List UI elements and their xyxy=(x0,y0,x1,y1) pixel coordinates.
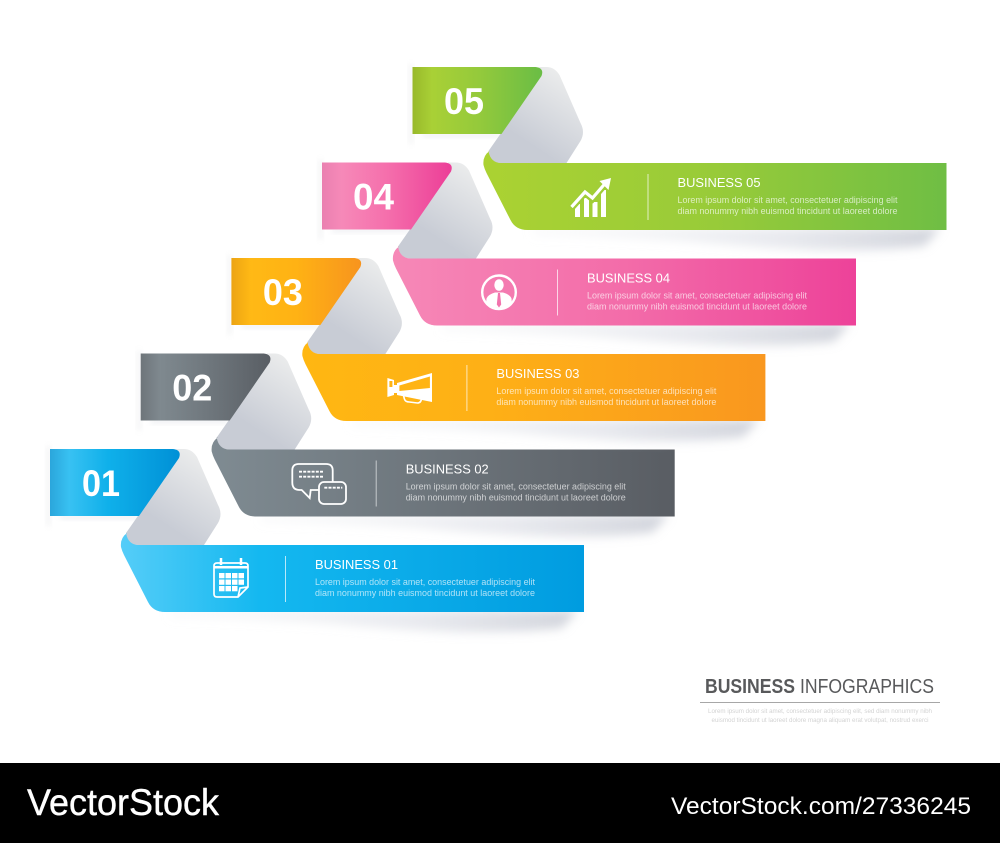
title block: business infographics xyxy=(700,676,940,724)
text: business 02: diam nonummy nibh euismod tincidunt ut laoreet dolore xyxy=(406,492,626,502)
text: business 04 xyxy=(587,270,808,312)
text: business 02: Lorem ipsum dolor sit amet, consectetuer adipiscing elit xyxy=(406,482,626,492)
step 02 ribbon xyxy=(137,350,675,537)
icon: megaphone xyxy=(387,373,432,403)
text: business 04: Lorem ipsum dolor sit amet, consectetuer adipiscing elit xyxy=(587,290,808,300)
text: business 02: BUSINESS 02 xyxy=(406,462,489,476)
icon: chat bubbles xyxy=(292,464,346,504)
text: business 03: Lorem ipsum dolor sit amet, consectetuer adipiscing elit xyxy=(496,386,717,396)
band 05 xyxy=(483,151,946,230)
step 01 ribbon xyxy=(46,446,584,632)
number tag 02 xyxy=(141,354,270,420)
divider xyxy=(376,460,377,506)
fold xyxy=(488,67,583,163)
icon: business person xyxy=(482,276,516,309)
band 02 xyxy=(212,438,675,516)
footer bar xyxy=(0,763,1000,843)
number 05: 05 xyxy=(444,81,484,122)
number tag 01 xyxy=(50,449,180,516)
fold xyxy=(307,258,402,354)
divider xyxy=(285,556,286,602)
icon: calendar xyxy=(214,558,248,597)
band 01 xyxy=(121,533,584,612)
text: business 01: diam nonummy nibh euismod tincidunt ut laoreet dolore xyxy=(315,588,535,598)
text: business 05: diam nonummy nibh euismod tincidunt ut laoreet dolore xyxy=(678,206,898,216)
footer logo: VectorStock xyxy=(27,782,219,823)
text: business 01: BUSINESS 01 xyxy=(315,557,398,572)
icon: growth chart xyxy=(572,178,611,217)
text: business 01: Lorem ipsum dolor sit amet, consectetuer adipiscing elit xyxy=(315,577,536,587)
text: business 03: BUSINESS 03 xyxy=(496,366,579,381)
band 04 xyxy=(393,246,856,326)
text: business 05 xyxy=(678,175,898,216)
text: business 04: BUSINESS 04 xyxy=(587,270,670,286)
number 02: 02 xyxy=(172,368,212,408)
number 04: 04 xyxy=(353,176,394,218)
fold xyxy=(126,449,220,545)
fold xyxy=(398,162,492,258)
text: business 03 xyxy=(496,366,717,407)
title block: business infographics: Lorem ipsum dolor sit amet, consectetuer adipiscing elit, sed diam nonummy nibh xyxy=(708,709,932,715)
title block: business infographics: BUSINESS xyxy=(705,676,795,698)
number 03: 03 xyxy=(263,272,303,313)
text: business 05: Lorem ipsum dolor sit amet, consectetuer adipiscing elit xyxy=(678,195,898,205)
fold xyxy=(217,354,311,450)
text: business 04: diam nonummy nibh euismod tincidunt ut laoreet dolore xyxy=(587,302,807,312)
number 01: 01 xyxy=(82,463,120,504)
number tag 03 xyxy=(231,258,361,325)
divider xyxy=(648,174,649,220)
number tag 05 xyxy=(412,67,542,134)
title block: business infographics: INFOGRAPHICS xyxy=(800,676,934,698)
step 03 ribbon xyxy=(227,255,765,441)
number tag 04 xyxy=(322,162,452,230)
divider xyxy=(466,365,467,411)
text: business 05: BUSINESS 05 xyxy=(678,175,760,190)
text: business 01 xyxy=(315,557,536,598)
band 03 xyxy=(302,342,765,421)
text: business 02 xyxy=(406,462,626,502)
divider xyxy=(557,270,558,316)
footer url: VectorStock.com/27336245 xyxy=(671,793,971,820)
step 04 ribbon xyxy=(318,160,856,346)
title block: business infographics: euismod tincidunt ut laoreet dolore magna aliquam erat volutpat, nostrud exerci xyxy=(712,718,928,724)
step 05 ribbon xyxy=(408,64,946,250)
text: business 03: diam nonummy nibh euismod tincidunt ut laoreet dolore xyxy=(496,397,717,407)
